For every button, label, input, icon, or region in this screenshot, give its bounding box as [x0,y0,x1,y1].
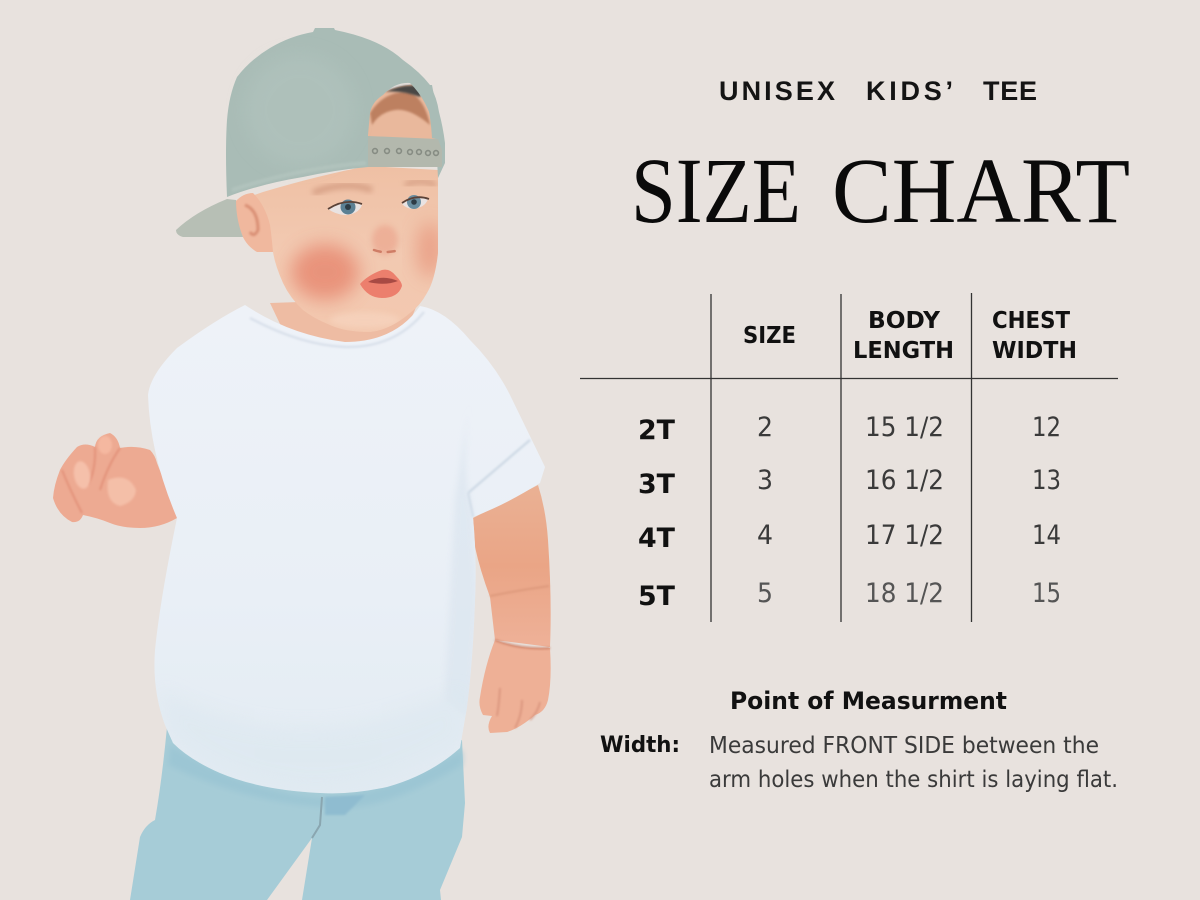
row: 3T [638,465,1061,500]
row: 4T [638,520,1061,554]
eyes [328,195,429,215]
nose [374,250,400,252]
heading: unisex kids tee [719,76,1037,106]
neck [270,298,420,345]
ear [235,193,273,252]
column headers: SIZE [743,323,796,349]
column headers: LENGTH [853,338,954,364]
t-shirt [148,305,545,793]
row: 2T: 15 1/2 [865,412,944,443]
right hand [479,640,551,733]
column headers: WIDTH [992,338,1077,364]
measurement description: arm holes when the shirt is laying flat. [709,767,1118,793]
row: 3T: 3T [638,469,676,500]
heading: point of measurement: Point of Measurment [730,687,1007,715]
mouth [360,270,402,298]
row: 4T: 4 [757,520,773,551]
row: 4T: 17 1/2 [865,520,944,551]
row: 4T: 14 [1032,520,1061,551]
jeans [130,727,465,900]
heading: unisex kids tee: KIDS’ [866,76,953,106]
row: 3T: 13 [1032,465,1061,496]
measurement description: Measured FRONT SIDE between the [709,733,1099,759]
cap crown [226,28,445,197]
title: size chart [631,140,1130,243]
heading: unisex kids tee: TEE [983,76,1037,106]
row: 5T: 5 [757,578,773,609]
left arm and hand [53,433,177,528]
photo: toddler in white tee and cap [53,28,551,900]
cap brim [176,199,243,237]
row: 2T: 2 [757,412,773,443]
row: 5T: 18 1/2 [865,578,944,609]
column headers: BODY [868,308,940,334]
row: 2T: 12 [1032,412,1061,443]
title: size chart: SIZE [631,140,801,243]
row: 2T [638,412,1061,446]
label: width: Width: [600,733,680,758]
heading: unisex kids tee: UNISEX [719,76,835,106]
row: 5T [638,578,1061,612]
row: 3T: 3 [757,465,773,496]
column headers [743,308,1077,364]
hair and scalp [368,84,441,140]
row: 4T: 4T [638,523,676,554]
row: 5T: 15 [1032,578,1061,609]
face [254,167,438,332]
title: size chart: CHART [832,140,1130,243]
row: 3T: 16 1/2 [865,465,944,496]
right arm [473,485,551,647]
measurement description [709,733,1118,793]
table grid lines [580,293,1118,622]
cap strap [368,136,442,167]
size table [580,293,1118,622]
column headers: CHEST [992,308,1070,334]
row: 5T: 5T [638,581,676,612]
row: 2T: 2T [638,415,676,446]
